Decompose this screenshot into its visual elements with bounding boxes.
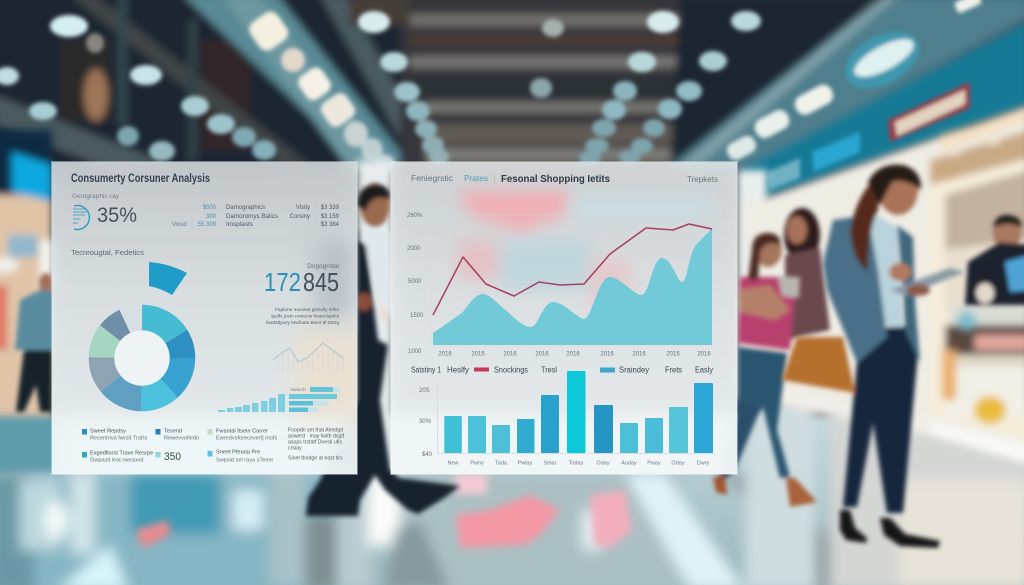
mini line chart	[273, 343, 343, 372]
stat description: Faplone muwnet ginsvlly tvhie	[275, 307, 339, 313]
donut chart	[95, 262, 187, 398]
bar chart: Pwny	[470, 460, 484, 466]
big number stat	[264, 263, 340, 297]
chart legend: Heslfy	[447, 366, 469, 374]
bar chart	[419, 371, 716, 466]
side note: Sinet thodge at east tirs	[288, 456, 343, 462]
legend	[82, 428, 277, 464]
legend: Tesend	[164, 428, 182, 434]
header tabs and title	[411, 173, 718, 185]
stat description: fastMtlyuzy Mwfoats Bwnt 8l Dstrg	[266, 320, 339, 326]
icon: gauge	[73, 206, 89, 229]
bar chart: Oday	[596, 460, 610, 466]
line and area chart: 1500	[410, 313, 424, 319]
demographic table: 55 309	[198, 222, 217, 228]
horizontal bars	[289, 387, 340, 412]
legend: Gwpasit leat rwesond	[90, 458, 143, 464]
bar chart: 20S	[419, 388, 430, 394]
stat: 35 percent: 35%	[97, 204, 137, 227]
line and area chart: 2016	[600, 352, 614, 358]
chart legend: Frets	[665, 366, 682, 374]
line and area chart: 260%	[407, 213, 423, 219]
line and area chart: 2016	[697, 352, 711, 358]
ceiling lights	[0, 0, 982, 174]
demographic table: Damographics	[226, 205, 265, 211]
demographic table: $3 384	[321, 222, 340, 228]
left store and floor	[0, 130, 1024, 585]
line and area chart: 2016	[503, 352, 517, 358]
bar chart: 30%	[419, 419, 432, 425]
demographic table: Damoromys Balics	[226, 214, 278, 220]
bar chart: Auday	[621, 460, 637, 466]
demographic table: $500	[203, 205, 217, 211]
bar chart: Pwlay	[518, 460, 533, 466]
reflective floor	[0, 400, 1024, 585]
line and area chart: 2016	[438, 352, 452, 358]
legend: Exgedfiorst Trave Resrpe	[90, 450, 153, 456]
chart legend	[411, 366, 713, 374]
stat description	[266, 307, 340, 326]
mini growth bars	[218, 394, 285, 412]
panel: consumer analysis	[52, 162, 357, 474]
bar chart: New	[447, 460, 459, 466]
legend: 350	[164, 451, 181, 463]
chart legend: Sraindey	[619, 366, 649, 374]
section label: Tecnrougtal, Fedetics	[71, 250, 145, 257]
legend: Ewredvsforeceverfj mofs	[216, 436, 277, 442]
header tabs and title: Prates	[464, 174, 488, 183]
demographic table: Visity	[296, 205, 310, 211]
subheading: Geotgraphic·ray	[72, 193, 120, 200]
woman in pink top	[713, 233, 817, 507]
big number stat: Dogogrotal	[307, 263, 340, 270]
pink floor reflections	[136, 474, 632, 548]
title: Consumerty Corsuner Analysis	[71, 173, 210, 185]
demographic table: Imsplasts	[226, 222, 253, 228]
line and area chart: 5000	[408, 279, 422, 285]
far left shopper	[15, 273, 55, 412]
line and area chart	[407, 213, 717, 358]
line and area chart: 2016	[632, 352, 646, 358]
chart legend: Easly	[695, 366, 713, 374]
demographic table: Vwsd	[172, 222, 187, 228]
side note: asops trstatf Doesti ufis	[288, 440, 342, 446]
bar chart: Pway	[647, 460, 661, 466]
right store interior	[745, 105, 1024, 465]
stat description: spdfs juvin nvwunw hwerclapins	[271, 314, 340, 320]
legend: Resentriva fwrsit Trafrs	[90, 436, 147, 442]
bar chart: Tada	[495, 460, 508, 466]
legend: Sneet Pfeurqi Pre	[216, 450, 260, 456]
ceiling and left upper floors	[0, 0, 1024, 205]
big number stat: 172	[264, 267, 301, 297]
line and area chart: 2000	[407, 246, 421, 252]
demographic table: $3 159	[321, 214, 340, 220]
line and area chart: 1000	[408, 349, 422, 355]
legend: Sweet Repdsy	[90, 428, 126, 434]
legend: Swpsid sel raya sTeme	[216, 458, 273, 464]
header tabs and title: Fesonal Shopping Ietits	[501, 173, 610, 185]
bar chart: Oday	[671, 460, 685, 466]
bar chart: Dwry	[697, 460, 710, 466]
bar chart: Today	[569, 460, 584, 466]
chart legend: Snockings	[494, 366, 528, 374]
big number stat: 845	[303, 267, 339, 297]
demographic table	[172, 201, 340, 229]
header tabs and title: Feniegrstic	[411, 174, 453, 183]
bar chart: $40	[422, 452, 433, 458]
demographic table: Corsiny	[290, 214, 310, 220]
horizontal bars: Awarch	[290, 387, 306, 393]
chart legend: Tresl	[541, 366, 557, 374]
side note	[288, 428, 345, 462]
legend: Fwantal Itsein Carrer	[216, 428, 268, 434]
store signs	[768, 20, 970, 190]
line and area chart: 2016	[566, 352, 580, 358]
line and area chart: 2015	[666, 352, 680, 358]
panel: personal shopping habits	[391, 162, 737, 474]
bar chart: Selar	[544, 460, 557, 466]
woman with tablet and bag	[782, 165, 965, 548]
line and area chart: 2015	[471, 352, 485, 358]
legend: Rewevvofiedo	[164, 436, 199, 442]
side note: crsiay	[288, 446, 302, 452]
store clerk	[965, 215, 1024, 305]
header tabs and title: Trepkets	[687, 175, 718, 184]
demographic table: 300	[206, 214, 217, 220]
side note: Foopdn set that Alredgd	[288, 428, 343, 434]
walking man	[306, 183, 460, 516]
woman in background	[784, 208, 830, 340]
demographic table: $3 339	[321, 205, 340, 211]
chart legend: Satstiny 1	[411, 366, 441, 374]
line and area chart: 2016	[535, 352, 549, 358]
side note: aowerd · may fwith dsgtf	[288, 434, 345, 440]
